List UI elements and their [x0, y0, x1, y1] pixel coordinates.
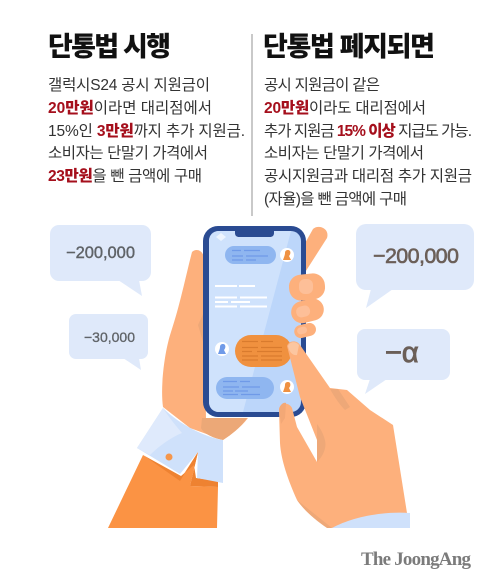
- icon: wifi: [216, 233, 226, 241]
- illustration: left shirt cuff: [137, 408, 223, 483]
- text block: right column: 20만원이라도 대리점에서: [264, 99, 426, 117]
- chat bubble: orange: [235, 335, 292, 367]
- column divider: [251, 34, 253, 216]
- heading: right column: 단통법 폐지되면: [263, 32, 435, 62]
- speech bubble: -30,000: [69, 314, 148, 370]
- speech bubble: minus alpha: [357, 329, 450, 394]
- chat bubble: bottom blue: [216, 377, 274, 399]
- text block: right column: 공시지원금과 대리점 추가 지원금: [264, 167, 472, 185]
- illustration: left thumb behind phone: [304, 227, 327, 274]
- text block: left column: 20만원이라면 대리점에서: [48, 99, 212, 117]
- speech bubble: minus alpha: −α: [385, 337, 419, 369]
- text block: left column: [48, 76, 245, 185]
- text block: right column: [264, 76, 472, 208]
- illustration: right shirt cuff: [332, 513, 410, 528]
- speech bubble: -30,000: −30,000: [84, 329, 135, 345]
- illustration: left hand fingers: [288, 272, 326, 339]
- illustration: left hand palm: [162, 250, 248, 440]
- text block: left column: 갤럭시S24 공시 지원금이: [48, 76, 210, 94]
- speech bubble: -200,000 left: −200,000: [66, 244, 135, 262]
- illustration: smartphone: [203, 226, 306, 417]
- logo: The JoongAng: [361, 549, 472, 570]
- speech bubble: -200,000 right: [356, 224, 474, 308]
- illustration: right hand: [279, 341, 407, 528]
- text block: right column: 공시 지원금이 같은: [264, 76, 380, 94]
- text block: right column: (자율)을 뺀 금액에 구매: [264, 190, 407, 208]
- text block: right column: 추가 지원금 15% 이상 지급도 가능.: [264, 122, 472, 140]
- text block: left column: 소비자는 단말기 가격에서: [48, 144, 208, 162]
- avatar: bottom orange: [280, 380, 294, 394]
- text lines: white message: [215, 286, 267, 306]
- avatar: top orange: [280, 248, 294, 262]
- text block: right column: 소비자는 단말기 가격에서: [264, 144, 424, 162]
- text block: left column: 23만원을 뺀 금액에 구매: [48, 167, 202, 185]
- heading: left column: 단통법 시행: [48, 32, 171, 62]
- text block: left column: 15%인 3만원까지 추가 지원금.: [48, 122, 245, 140]
- speech bubble: -200,000 left: [50, 225, 151, 296]
- chat bubble: top blue: [225, 246, 276, 264]
- avatar: blue: [215, 342, 229, 356]
- illustration: left sleeve: [108, 452, 218, 528]
- speech bubble: -200,000 right: −200,000: [373, 244, 459, 268]
